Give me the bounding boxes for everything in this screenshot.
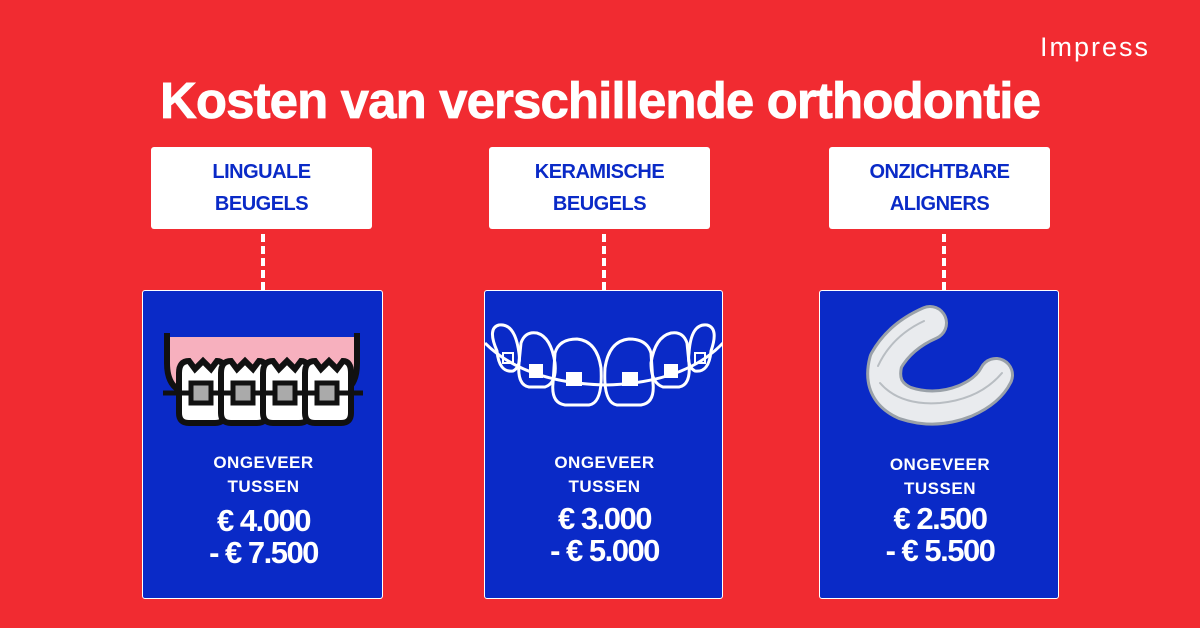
icon: ceramic braces <box>485 323 722 406</box>
price text: - € 5.500 <box>886 533 994 568</box>
label: onzichtbare: ONZICHTBARE <box>869 161 1010 183</box>
label: onzichtbare: ALIGNERS <box>890 193 989 215</box>
icon: braces teeth <box>163 333 363 426</box>
connector 2 <box>602 234 606 290</box>
icon: aligner <box>866 305 1014 426</box>
price text: € 4.000 <box>217 503 310 538</box>
label: onzichtbare <box>829 147 1050 229</box>
price text: TUSSEN <box>569 477 640 496</box>
label: keramische: KERAMISCHE <box>535 161 664 183</box>
price text: ONGEVEER <box>554 453 655 472</box>
panel: onzichtbare <box>819 290 1059 599</box>
connector 3 <box>942 234 946 290</box>
panel: keramische <box>484 290 723 599</box>
price text: TUSSEN <box>904 479 976 498</box>
label: keramische: BEUGELS <box>553 193 646 215</box>
label: keramische <box>489 147 710 229</box>
price text: - € 7.500 <box>209 535 318 570</box>
price text <box>550 453 660 568</box>
price text: TUSSEN <box>228 477 299 496</box>
price text: € 3.000 <box>558 501 651 536</box>
price text: ONGEVEER <box>213 453 314 472</box>
price text: ONGEVEER <box>890 455 990 474</box>
logo: Impress <box>1040 32 1150 62</box>
connector 1 <box>261 234 265 290</box>
label: linguale: LINGUALE <box>212 161 311 183</box>
price text <box>209 453 318 570</box>
price text: € 2.500 <box>894 501 986 536</box>
label: linguale <box>151 147 372 229</box>
label: linguale: BEUGELS <box>215 193 308 215</box>
title: Kosten van verschillende orthodontie <box>160 72 1040 129</box>
price text: - € 5.000 <box>550 533 659 568</box>
price text <box>886 455 995 568</box>
panel: linguale <box>142 290 383 599</box>
